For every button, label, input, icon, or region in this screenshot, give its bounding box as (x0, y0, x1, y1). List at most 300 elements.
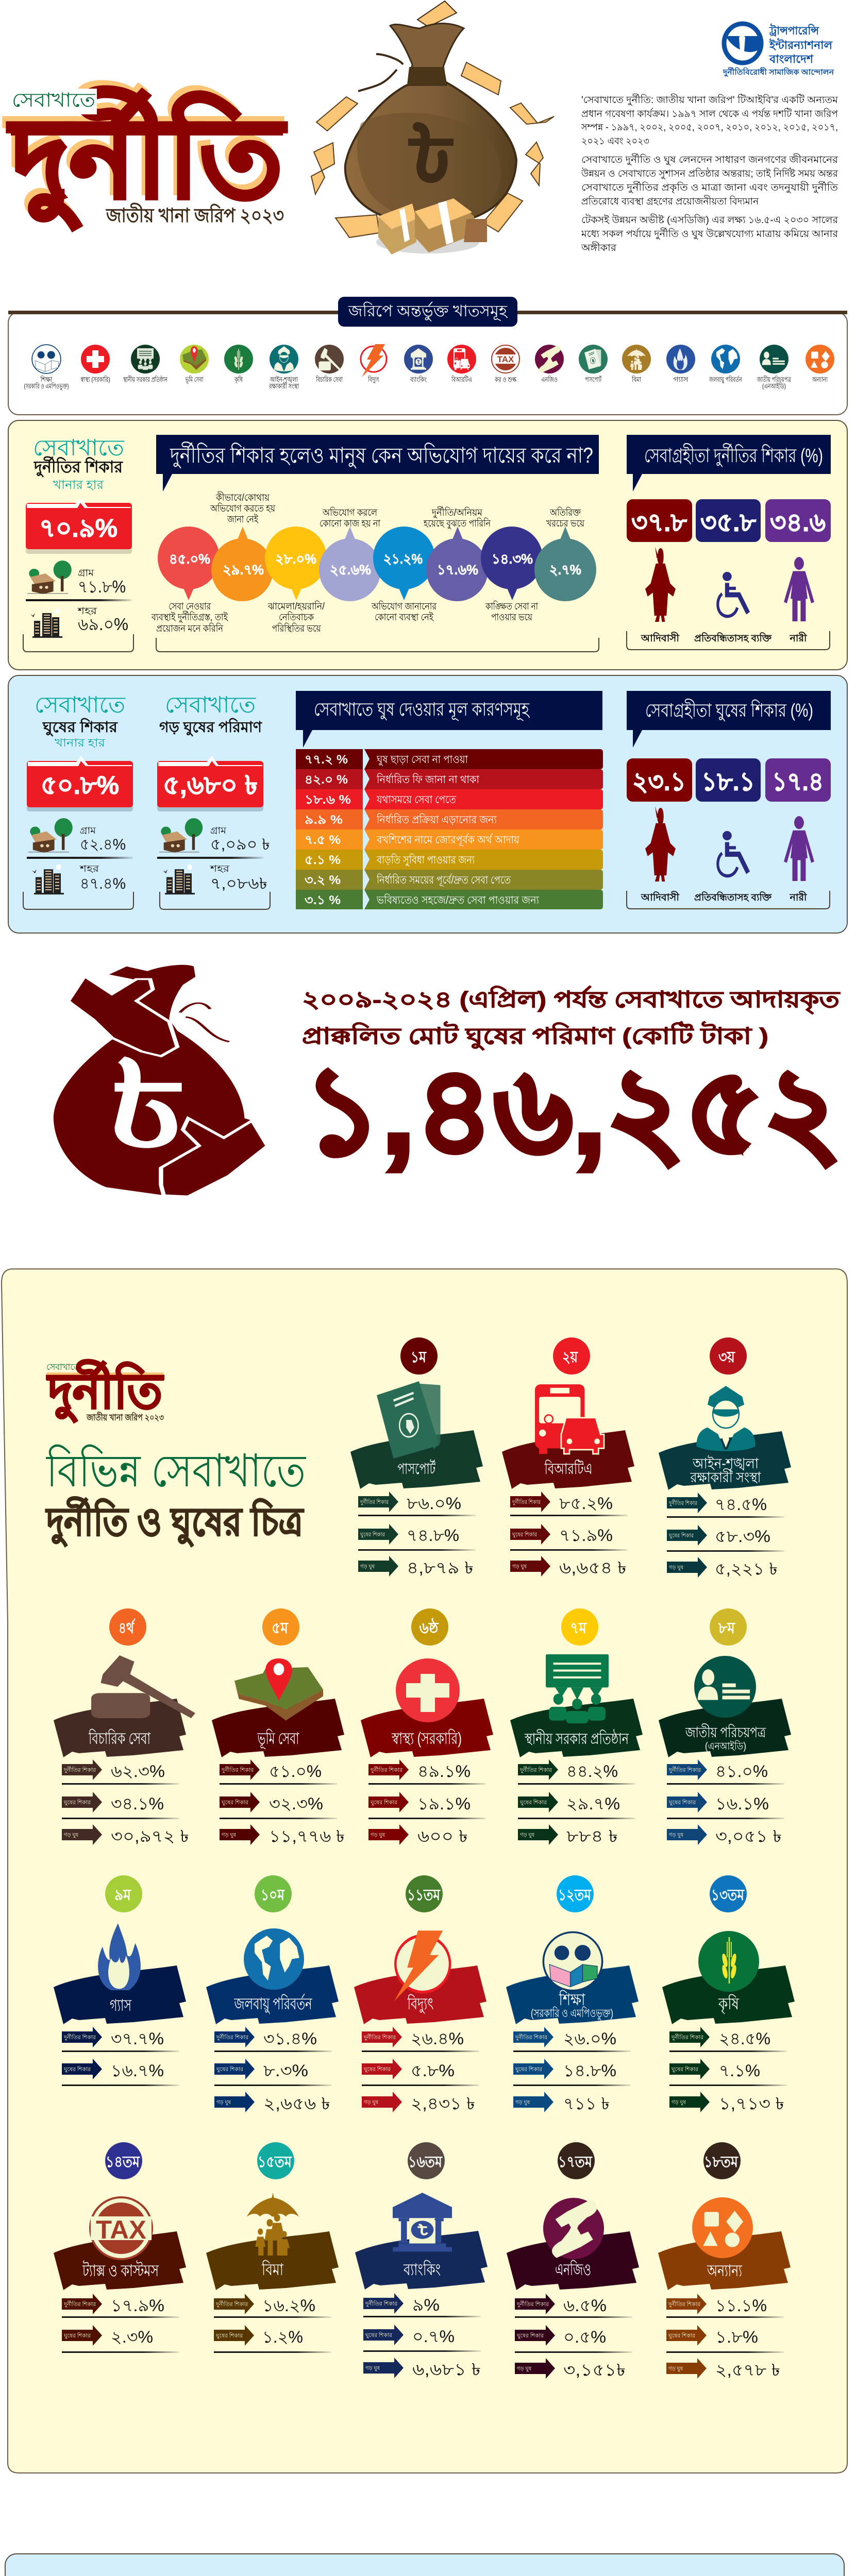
rank: ১৩তম (711, 1887, 745, 1904)
stats: ঘুষের শিকার (216, 2066, 244, 2073)
labels: প্রতিবন্ধিতাসহ ব্যক্তি (694, 891, 773, 903)
rank (710, 1337, 747, 1375)
stats: ৮৬.০% (407, 1494, 461, 1513)
stats: গড় ঘুষ (360, 1564, 375, 1570)
ribbon: ভূমি সেবা (257, 1728, 299, 1750)
rows: যথাসময়ে সেবা পেতে (376, 794, 457, 806)
title block: সেবাখাতে দুর্নীতি (4, 82, 287, 230)
rank: ৫ম (272, 1620, 289, 1637)
urban: শহর (79, 863, 99, 874)
rank: ১১তম (407, 1887, 441, 1904)
rank (105, 1875, 142, 1912)
icon (90, 2197, 152, 2259)
bubbles: ১৪.৩% (492, 551, 533, 567)
bubbles: ২৫.৬% (330, 562, 371, 578)
value boxes (627, 758, 831, 802)
rows: ৭৭.২ % (305, 753, 348, 767)
big number: ১,৪৬,২৫২ (303, 1045, 842, 1178)
stats: গড় ঘুষ (371, 1832, 385, 1838)
stats: ১১.১% (715, 2296, 767, 2315)
stats: ২৪.৫% (719, 2029, 770, 2048)
icon (698, 1931, 759, 1992)
icon: agriculture (224, 345, 253, 374)
stats: দুর্নীতির শিকার (63, 2301, 96, 2308)
stats: দুর্নীতির শিকার (365, 2300, 398, 2307)
stats: ৩১.৪% (263, 2029, 317, 2048)
stats: গড় ঘুষ (517, 2366, 532, 2372)
labels: প্রতিবন্ধিতাসহ ব্যক্তি (694, 632, 773, 644)
text block: intro paragraphs: প্রধান গবেষণা কার্যক্রম। ১৯৯৭ সাল থেকে এ পর্যন্ত দশটি খানা জরিপ (581, 108, 838, 120)
rank (703, 2142, 741, 2179)
block: households victim of bribery: সেবাখাতে (35, 692, 126, 718)
ribbon: গ্যাস (110, 1996, 132, 2014)
icon: bag held by two hands (54, 965, 267, 1196)
card: law enforcement (659, 1337, 791, 1578)
icon: climate (711, 345, 740, 374)
stats: ১৬.২% (262, 2296, 315, 2315)
icon (394, 1930, 450, 2001)
rows: ১৮.৬ % (305, 793, 351, 807)
ribbon: বিচারিক সেবা (88, 1728, 150, 1748)
panel: corruption (yellow) (8, 420, 847, 670)
rank (105, 2142, 142, 2179)
labels: sector names: রক্ষাকারী সংস্থা (268, 382, 299, 390)
rank: ৩য় (718, 1349, 735, 1366)
icon: NGO (535, 345, 564, 374)
stats: ২৯.৭% (566, 1794, 620, 1813)
stats (214, 2027, 332, 2113)
icon: tax (492, 345, 519, 373)
stats: ১,৭১৩ ৳ (719, 2094, 784, 2113)
rows: বখশিশের নামে জোরপূর্বক অর্থ আদায় (376, 833, 520, 846)
ribbon: কৃষি (718, 1994, 740, 2014)
stats: ৪৪.২% (566, 1762, 618, 1781)
icon: money bag with notes (311, 1, 554, 255)
stat box: 70.9% (26, 498, 132, 554)
rank: ৬ষ্ঠ (419, 1618, 439, 1637)
stats: ১৬.৭% (111, 2061, 164, 2080)
stats: ঘুষের শিকার (519, 1799, 547, 1806)
heading: বিভিন্ন সেবাখাতে (45, 1444, 307, 1496)
chart: victims of corruption by group (627, 435, 831, 650)
stats (62, 2027, 179, 2086)
stats: ৭৪.৮% (407, 1526, 459, 1545)
stats: ঘুষের শিকার (516, 2332, 544, 2339)
labels: reasons: ঝামেলা/হয়রানি/ (267, 601, 325, 612)
ribbon: শিক্ষা (559, 1990, 585, 2009)
text: organisation name: দুর্নীতিবিরোধী সামাজিক আন্দোলন (723, 67, 834, 77)
rows (296, 749, 603, 909)
stats: গড় ঘুষ (669, 1832, 684, 1838)
heading: দুর্নীতির শিকার হলেও মানুষ কেন অভিযোগ দায়ের করে না? (170, 442, 593, 469)
rank: ১৭তম (558, 2154, 593, 2171)
stats: ঘুষের শিকার (221, 1799, 249, 1806)
stats: ঘুষের শিকার (671, 2066, 699, 2073)
logo: small title: দুর্নীতি (46, 1360, 164, 1422)
urban (32, 863, 126, 894)
card: passport (350, 1337, 483, 1577)
panel: total bribe amount (blue) (5, 2554, 844, 2576)
labels: reasons: কাঙ্ক্ষিত সেবা না (485, 601, 538, 612)
ribbon: রক্ষাকারী সংস্থা (690, 1468, 761, 1485)
stats: ৫৮.৩% (715, 1527, 770, 1546)
stats: ১৯.১% (417, 1794, 471, 1813)
stats: ৩০,৯৭২ ৳ (111, 1827, 189, 1845)
rank (710, 1608, 747, 1646)
logo: small title: জাতীয় খানা জরিপ ২০২৩ (86, 1412, 164, 1422)
card: local government (510, 1608, 643, 1845)
rank: ৮ম (718, 1620, 735, 1637)
card: land (212, 1608, 345, 1845)
stats: দুর্নীতির শিকার (370, 1767, 403, 1773)
labels: sector names: বিআরটিএ (451, 376, 472, 383)
ribbon (355, 2231, 488, 2290)
ribbon: (সরকারি ও এমপিওভুক্ত) (531, 2007, 613, 2021)
urban: ৪৭.৪% (80, 875, 126, 892)
icon (396, 1658, 460, 1722)
card: electricity (354, 1875, 486, 2113)
icon (535, 1384, 604, 1454)
rows: ৩.১ % (305, 893, 341, 907)
stats: ঘুষের শিকার (360, 1531, 385, 1538)
text block: intro paragraphs: ২০২১ এবং ২০২৩ (581, 136, 649, 147)
stats: দুর্নীতির শিকার (216, 2034, 249, 2041)
stats: ২,৪৩১ ৳ (411, 2094, 475, 2113)
stat box: 5,680 taka (157, 756, 263, 811)
rank (553, 1337, 590, 1375)
ribbon: ট্যাক্স ও কাস্টমস (82, 2260, 159, 2280)
block: average bribe (157, 692, 270, 909)
heading: সেবাগ্রহীতা ঘুষের শিকার (%) (645, 699, 813, 722)
stats: দুর্নীতির শিকার (668, 1767, 701, 1773)
icon row: 18 sectors (32, 344, 834, 377)
labels: sector names: শিক্ষা (40, 376, 53, 383)
stats: ৬২.৩% (111, 1762, 165, 1781)
stats: ২.৩% (111, 2328, 153, 2346)
stats: ৯% (412, 2296, 440, 2314)
stats: দুর্নীতির শিকার (221, 1767, 254, 1773)
icon (694, 1656, 756, 1718)
stats: ৩৪.১% (111, 1794, 164, 1813)
stats: ঘুষের শিকার (63, 2332, 91, 2339)
ribbon (658, 2231, 791, 2290)
rows: ৩.২ % (305, 873, 341, 887)
ribbon: (এনআইডি) (705, 1740, 746, 1752)
stats: ঘুষের শিকার (215, 2332, 243, 2339)
chart: why people do not complain (151, 435, 599, 652)
rank: ৪র্থ (119, 1618, 136, 1637)
value boxes: ২৩.১ (632, 767, 686, 796)
rank: ২য় (562, 1349, 578, 1366)
callout: total bribe 2009-2024 (54, 965, 842, 1196)
urban (30, 606, 128, 638)
icon (247, 2193, 299, 2256)
stats: দুর্নীতির শিকার (63, 1767, 96, 1773)
text block: intro paragraphs (581, 94, 838, 253)
stats: গড় ঘুষ (668, 2366, 683, 2372)
card: gas (54, 1875, 186, 2086)
ribbon: স্বাস্থ্য (সরকারি) (391, 1728, 462, 1748)
stats: দুর্নীতির শিকার (519, 1767, 552, 1773)
stats: ৬,৬৮১ ৳ (412, 2360, 481, 2379)
labels: sector names: কৃষি (234, 376, 243, 384)
labels: sector names: স্বাস্থ্য (সরকারি) (80, 376, 110, 383)
labels: reasons: নেতিবাচক (279, 612, 314, 623)
stats: ২৬.৪% (411, 2029, 464, 2048)
stats: ৭.১% (719, 2061, 760, 2080)
stats: ৬০০ ৳ (417, 1827, 468, 1845)
bubbles (158, 527, 596, 601)
ribbon (206, 1965, 339, 2024)
stats (368, 1759, 486, 1845)
rural: গ্রাম (80, 825, 96, 836)
stats: দুর্নীতির শিকার (515, 2034, 548, 2041)
labels: reasons: পাওয়ার ভয়ে (491, 612, 533, 623)
stats: ২,৫৭৮ ৳ (715, 2361, 780, 2379)
icon (91, 1655, 195, 1718)
rank (109, 1608, 146, 1646)
icon: TAX (96, 2215, 146, 2244)
rank: ১৪তম (106, 2154, 140, 2171)
stats: গড় ঘুষ (515, 2099, 530, 2106)
heading (627, 435, 831, 492)
icons: indigenous, disabled, women (645, 547, 814, 622)
heading: sectors tab: জরিপে অন্তর্ভুক্ত খাতসমূহ (348, 301, 508, 321)
stats: ঘুষের শিকার (515, 2066, 543, 2073)
stats (666, 2294, 784, 2379)
stats (518, 1759, 635, 1845)
labels: আদিবাসী (641, 632, 680, 644)
labels: sector names: জাতীয় পরিচয়পত্র (757, 376, 791, 383)
labels: reasons: অতিরিক্ত (549, 507, 581, 518)
stats: ঘুষের শিকার (365, 2332, 393, 2338)
icon: BRTA (447, 345, 476, 374)
ribbon (361, 1699, 493, 1757)
labels: sector names: আইন-শৃঙ্খলা (270, 376, 298, 384)
labels: sector names: এনজিও (541, 376, 558, 383)
stats: গড় ঘুষ (512, 1564, 527, 1570)
rank: ১২তম (558, 1887, 592, 1904)
stats: ৩,০৫১ ৳ (715, 1827, 782, 1845)
stats (62, 1759, 189, 1845)
stats (62, 2294, 179, 2353)
stats: ঘুষের শিকার (363, 2066, 391, 2073)
heading (156, 435, 599, 492)
stats: ৮.৩% (263, 2061, 308, 2080)
rank (262, 1608, 299, 1646)
stats: গড় ঘুষ (672, 2099, 686, 2106)
stat box: 50.8% (27, 756, 133, 811)
ribbon (659, 1699, 791, 1757)
panel: sector-wise corruption and bribery (2, 1269, 847, 2473)
heading: period: ২০০৯-২০২৪ (এপ্রিল) পর্যন্ত সেবাখাতে আদায়কৃত (302, 986, 841, 1014)
icon: health (81, 345, 110, 374)
rows: নির্ধারিত প্রক্রিয়া এড়ানোর জন্য (376, 813, 497, 826)
urban: ৭,০৮৬৳ (210, 875, 267, 892)
rank (710, 1875, 747, 1912)
block: average bribe: গড় ঘুষের পরিমাণ (159, 718, 262, 737)
card: judiciary (54, 1608, 195, 1845)
text block: intro paragraphs: সম্পন্ন - ১৯৯৭, ২০০২, ২০০৫, ২০০৭, ২০১০, ২০১২, ২০১৫, ২০১৭, (581, 122, 838, 133)
stats: ৬.৫% (563, 2296, 607, 2315)
stats: দুর্নীতির শিকার (360, 1499, 389, 1505)
rows: ৭.৫ % (305, 833, 341, 847)
stats: ৫,২২১ ৳ (715, 1560, 778, 1578)
chart: victims of bribery by group (627, 691, 831, 909)
ribbon (507, 2231, 639, 2290)
rank (557, 1875, 594, 1912)
stats: ০.৫% (563, 2328, 606, 2346)
ribbon: বিদ্যুৎ (407, 1994, 434, 2014)
labels: reasons: অভিযোগ করতে হয় (210, 503, 276, 514)
stats: দুর্নীতির শিকার (63, 2034, 96, 2041)
labels: reasons: কীভাবে/কোথায় (215, 492, 270, 503)
text: organisation name: ইন্টারন্যাশনাল (769, 38, 833, 52)
icon: gas (666, 345, 695, 374)
stats: ০.৭% (412, 2327, 455, 2346)
icon: TIB emblem (724, 24, 762, 63)
stats (358, 1492, 476, 1577)
text block: intro paragraphs: প্রতিরোধে ব্যবস্থা গ্রহণের প্রয়োজনীয়তা বিদ্যমান (581, 195, 759, 207)
heading (45, 1444, 307, 1547)
card: agriculture (662, 1875, 795, 2113)
rural (28, 818, 126, 853)
labels (641, 632, 808, 644)
icon: insurance (622, 345, 651, 374)
block: households victim of corruption (23, 435, 133, 652)
stats: গড় ঘুষ (222, 1832, 237, 1838)
labels: reasons (151, 492, 585, 634)
rank: ১৬তম (408, 2154, 443, 2171)
card: BRTA (502, 1337, 634, 1577)
card: education (506, 1875, 639, 2113)
icon: banking (404, 345, 433, 374)
icon: land (180, 345, 209, 374)
ribbon (212, 1699, 344, 1757)
rural (159, 818, 270, 853)
ribbon (354, 1965, 486, 2024)
rows: ৯.৯ % (305, 813, 343, 827)
stats: গড় ঘুষ (64, 1832, 79, 1838)
card: NID (659, 1608, 791, 1845)
text block: intro paragraphs: উন্নয়ন ও সেবাখাতে সুশাসন প্রতিষ্ঠার অন্তরায়; তাই নির্দিষ্ট সময় অন্তর (581, 167, 838, 179)
ribbon: জলবায়ু পরিবর্তন (234, 1994, 312, 2014)
stats (667, 1493, 784, 1578)
ribbon (502, 1430, 634, 1489)
heading: period: প্রাক্কলিত মোট ঘুষের পরিমাণ (কোটি টাকা ) (302, 1021, 768, 1050)
stats: ৪,৮৭৯ ৳ (407, 1558, 474, 1577)
stats: ১৬.১% (715, 1794, 769, 1813)
stat box: 5,680 taka: ৫,৬৮০ ৳ (163, 771, 258, 800)
value boxes: ৩৪.৬ (770, 508, 826, 537)
rural: গ্রাম (210, 825, 227, 836)
stats: ঘুষের শিকার (668, 1799, 696, 1806)
bubbles: ২.৭% (549, 562, 581, 578)
ribbon (206, 2231, 339, 2290)
heading: দুর্নীতি: দুর্নীতি (4, 82, 283, 225)
icon (244, 1928, 304, 1990)
labels: reasons: সেবা নেওয়ার (169, 601, 211, 612)
stats: ৬,৬৫৪ ৳ (559, 1558, 627, 1577)
labels: sector names: (এনআইডি) (762, 382, 786, 390)
stat box: 50.8%: ৫০.৮% (41, 771, 119, 800)
rank: ১৫তম (258, 2154, 292, 2171)
ribbon: বিআরটিএ (544, 1459, 593, 1478)
text block: intro paragraphs: টেকসই উন্নয়ন অভীষ্ট (এসডিজি) এর লক্ষ্য ১৬.৫-এ ২০৩০ সালের (581, 214, 838, 226)
icon (98, 1923, 141, 1990)
stats: ২৬.০% (563, 2029, 616, 2048)
stats: ৮৮৪ ৳ (566, 1827, 618, 1845)
rural: গ্রাম (78, 568, 94, 579)
stats (220, 1759, 345, 1845)
rank (408, 2142, 445, 2179)
stats: ৫.৮% (411, 2061, 455, 2080)
labels: sector names: জলবায়ু পরিবর্তন (709, 376, 742, 384)
icon (543, 2198, 604, 2259)
labels: sector names: (সরকারি ও এমপিওভুক্ত) (24, 382, 69, 391)
stats: গড় ঘুষ (520, 1832, 535, 1838)
rural: ৫২.৪% (80, 836, 126, 853)
urban: শহর (210, 863, 230, 874)
rank: ৯ম (114, 1887, 131, 1904)
icon: education (32, 345, 61, 374)
icon: others (805, 345, 834, 374)
rows: ভবিষ্যতেও সহজে/দ্রুত সেবা পাওয়ার জন্য (376, 894, 540, 906)
icons: indigenous, disabled, women (645, 806, 814, 882)
bubbles: ৪৫.০% (169, 551, 210, 567)
stats: দুর্নীতির শিকার (363, 2034, 396, 2041)
rural: ৭১.৮% (78, 577, 126, 596)
rows: ৫.১ % (305, 853, 341, 867)
ribbon (510, 1699, 643, 1757)
ribbon (54, 2231, 186, 2290)
heading: দুর্নীতি: দুর্নীতি (7, 87, 287, 230)
ribbon: অন্যান্য (707, 2261, 743, 2280)
stats: ৭১১ ৳ (563, 2094, 610, 2113)
ribbon: পাসপোর্ট (397, 1459, 435, 1478)
ribbon: স্থানীয় সরকার প্রতিষ্ঠান (524, 1729, 629, 1748)
labels: sector names: বিদ্যুৎ (367, 376, 379, 384)
labels: reasons: অভিযোগ করলে (322, 507, 378, 518)
icon (234, 1658, 323, 1721)
bubbles: ২১.২% (383, 551, 423, 567)
card: tax and customs (54, 2142, 186, 2353)
stats (214, 2294, 331, 2353)
bubbles: ১৭.৬% (437, 562, 478, 578)
stats: দুর্নীতির শিকার (516, 2301, 549, 2308)
rural: ৫,০৯০ ৳ (210, 836, 270, 853)
stats: দুর্নীতির শিকার (512, 1499, 541, 1505)
labels: reasons: প্রয়োজন মনে করিনি (156, 623, 224, 634)
block: households victim of bribery (23, 692, 133, 909)
labels: sector names: অন্যান্য (812, 376, 828, 383)
rural (27, 561, 126, 596)
labels: sector names: ব্যাংকিং (410, 376, 427, 383)
rank: ১৮তম (704, 2154, 738, 2171)
rows: নির্ধারিত সময়ের পূর্বে/দ্রুত সেবা পেতে (376, 873, 511, 886)
stats: ঘুষের শিকার (370, 1799, 398, 1806)
stats: দুর্নীতির শিকার (215, 2301, 248, 2308)
labels: sector names: বিচারিক সেবা (315, 376, 343, 383)
icon: law enforcement (270, 345, 298, 374)
urban (163, 863, 267, 894)
ribbon (350, 1430, 483, 1489)
labels: sector names (24, 376, 828, 391)
stats: ৩৭.৭% (111, 2029, 164, 2048)
rank (411, 1608, 448, 1646)
ribbon: আইন-শৃঙ্খলা (692, 1455, 759, 1472)
icon (696, 1386, 756, 1451)
